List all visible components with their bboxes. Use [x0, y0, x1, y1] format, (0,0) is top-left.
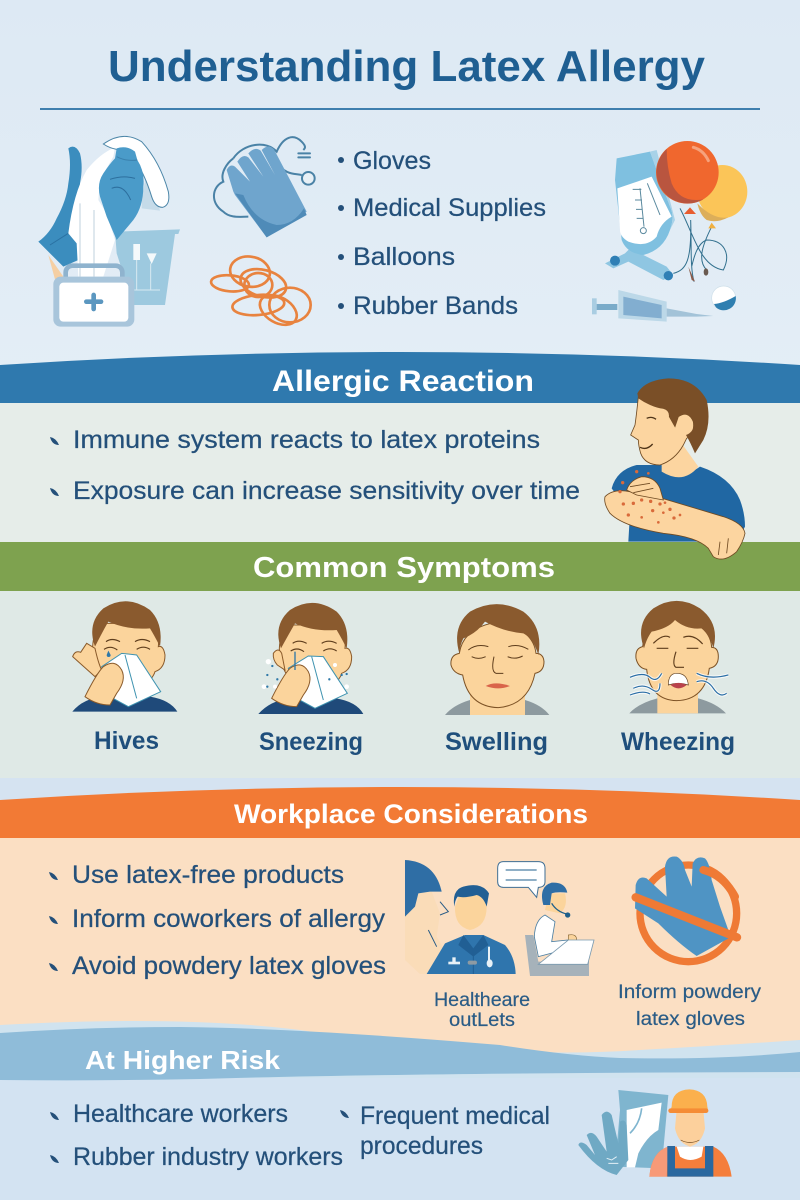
list: latex products: Medical Supplies	[353, 194, 546, 222]
label: wheezing: Wheezing	[621, 728, 735, 756]
icon: person wheezing	[629, 601, 728, 713]
illustration: man with rash	[605, 378, 745, 559]
symptom: hives	[72, 601, 177, 755]
illustration: healthcare staff	[405, 860, 594, 976]
title rule	[40, 108, 760, 110]
icon: rubber bands	[210, 253, 311, 331]
icon: person blowing nose	[72, 601, 177, 712]
bullet list: risk groups: procedures	[360, 1132, 483, 1160]
panel: allergic reaction	[0, 352, 800, 545]
caption: healthcare outlets: outLets	[449, 1010, 515, 1031]
icon: no latex gloves	[635, 856, 737, 962]
title: Understanding Latex Allergy	[108, 42, 706, 91]
heading: at higher risk: At Higher Risk	[85, 1045, 281, 1075]
bullet list: risk groups: Healthcare workers	[73, 1100, 288, 1128]
band: allergic reaction heading	[0, 352, 800, 403]
caption: inform powdery latex gloves: latex gloves	[636, 1009, 745, 1030]
list: latex products: Balloons	[353, 243, 455, 271]
bullet list: workplace: Avoid powdery latex gloves	[72, 952, 386, 980]
band: common symptoms heading	[0, 542, 800, 591]
caption: inform powdery latex gloves	[618, 982, 762, 1030]
caption: healthcare outlets	[434, 990, 530, 1031]
bullet list: reaction: Immune system reacts to latex proteins	[73, 426, 540, 454]
heading: allergic reaction: Allergic Reaction	[272, 365, 534, 398]
caption: healthcare outlets: Healtheare	[434, 990, 530, 1011]
icon: gloves and first aid kit	[38, 136, 180, 327]
label: swelling: Swelling	[445, 728, 548, 756]
symptom: wheezing	[621, 601, 735, 756]
bullet list: risk groups	[50, 1100, 550, 1171]
icon: inhaler, balloons and syringe	[592, 141, 747, 322]
symptom: sneezing	[258, 603, 363, 756]
band: at higher risk heading	[0, 1027, 800, 1080]
illustration: glove and construction worker	[578, 1089, 732, 1177]
band: workplace heading	[0, 787, 800, 838]
bullet list: reaction	[50, 426, 580, 505]
panel: header background	[0, 0, 800, 400]
icon: glove with stethoscope	[214, 137, 315, 237]
list: latex products: Gloves	[353, 147, 431, 175]
icon: person sneezing	[258, 603, 363, 714]
label: hives: Hives	[94, 727, 159, 755]
heading: workplace considerations: Workplace Considerations	[234, 799, 588, 829]
bullet list: workplace: Inform coworkers of allergy	[72, 905, 386, 933]
icon: swollen face	[445, 604, 549, 715]
bullet list: workplace	[49, 861, 386, 980]
symptom: swelling	[445, 604, 549, 756]
panel: common symptoms	[0, 542, 800, 780]
panel: workplace considerations	[0, 778, 800, 1066]
label: sneezing: Sneezing	[259, 728, 363, 756]
bullet list: workplace: Use latex-free products	[72, 861, 344, 889]
list: latex products: Rubber Bands	[353, 292, 518, 320]
list: latex products	[338, 147, 546, 320]
caption: inform powdery latex gloves: Inform powdery	[618, 982, 762, 1003]
panel: at higher risk	[0, 1021, 800, 1200]
heading: common symptoms: Common Symptoms	[253, 552, 555, 584]
bullet list: reaction: Exposure can increase sensitivity over time	[73, 477, 580, 505]
bullet list: risk groups: Frequent medical	[360, 1102, 550, 1130]
bullet list: risk groups: Rubber industry workers	[73, 1143, 343, 1171]
